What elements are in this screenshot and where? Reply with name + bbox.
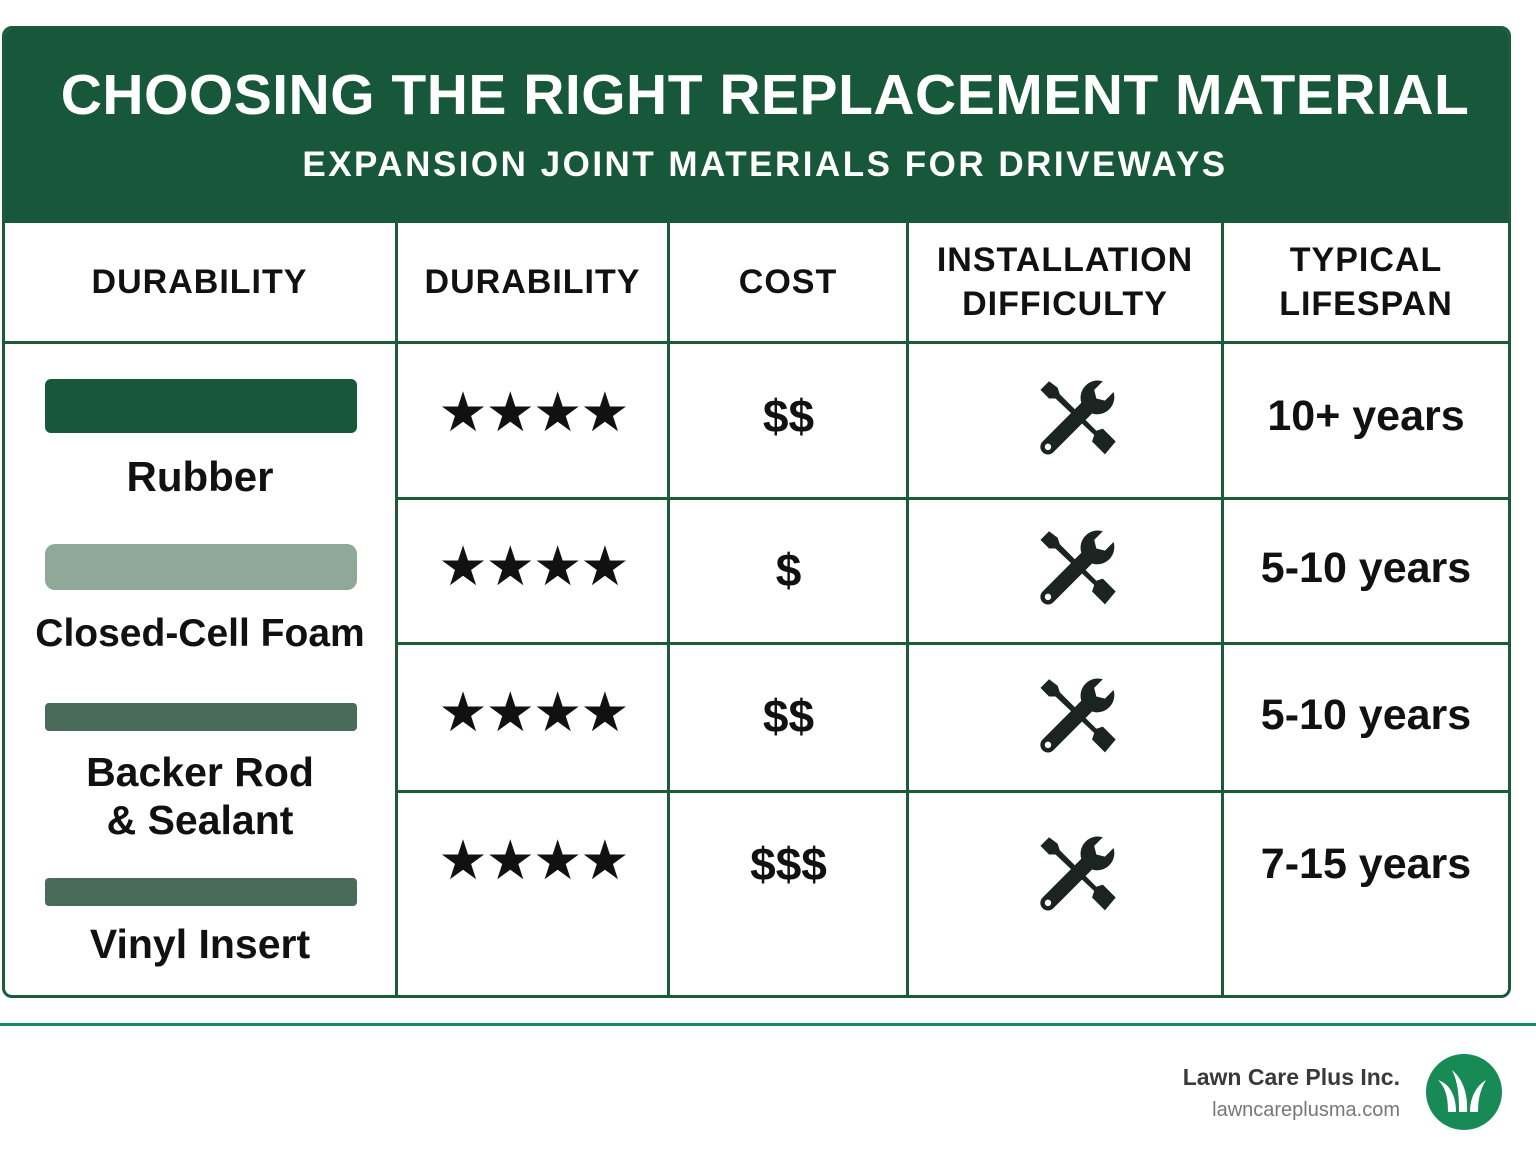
stars row 4: ★★★★ bbox=[438, 829, 628, 891]
header banner bbox=[5, 29, 1514, 223]
footer brand text bbox=[1183, 1064, 1400, 1121]
footer brand text: lawncareplusma.com bbox=[1212, 1099, 1400, 1121]
title: CHOOSING THE RIGHT REPLACEMENT MATERIAL bbox=[61, 63, 1469, 127]
material: rubber bbox=[45, 379, 357, 500]
stars row 3: ★★★★ bbox=[438, 681, 628, 743]
logo bbox=[1426, 1054, 1502, 1130]
text: TYPICAL bbox=[1290, 241, 1442, 279]
cost row 1: $$ bbox=[763, 390, 814, 442]
material: rubber: Rubber bbox=[126, 453, 274, 500]
icon: tools row 3 bbox=[1040, 678, 1116, 752]
material: vinyl insert: Vinyl Insert bbox=[90, 921, 310, 967]
icon: tools row 2 bbox=[1040, 530, 1116, 604]
footer brand text: Lawn Care Plus Inc. bbox=[1183, 1064, 1400, 1090]
material: vinyl insert bbox=[45, 878, 357, 967]
material: backer rod & sealant: & Sealant bbox=[107, 797, 293, 843]
lifespan row 1: 10+ years bbox=[1267, 392, 1465, 440]
text: COST bbox=[739, 263, 837, 301]
text: DURABILITY bbox=[425, 263, 640, 301]
lifespan row 3: 5-10 years bbox=[1261, 691, 1471, 739]
icon: tools row 1 bbox=[1040, 380, 1116, 454]
material: backer rod & sealant bbox=[45, 703, 357, 843]
material: backer rod & sealant: Backer Rod bbox=[86, 749, 314, 795]
lifespan row 2: 5-10 years bbox=[1261, 544, 1471, 592]
cost row 4: $$$ bbox=[750, 838, 827, 890]
cost row 3: $$ bbox=[763, 690, 814, 742]
column headers: DURABILITY bbox=[92, 263, 307, 301]
text: LIFESPAN bbox=[1279, 285, 1453, 323]
icon: tools row 4 bbox=[1040, 836, 1116, 910]
cost row 2: $ bbox=[776, 544, 801, 596]
material: closed-cell foam bbox=[35, 544, 365, 655]
lifespan row 4: 7-15 years bbox=[1261, 840, 1471, 888]
subtitle: EXPANSION JOINT MATERIALS FOR DRIVEWAYS bbox=[302, 145, 1228, 184]
text: DIFFICULTY bbox=[962, 285, 1168, 323]
stars row 1: ★★★★ bbox=[438, 381, 628, 443]
text: INSTALLATION bbox=[937, 241, 1193, 279]
stars row 2: ★★★★ bbox=[438, 535, 628, 597]
material: closed-cell foam: Closed-Cell Foam bbox=[35, 612, 365, 655]
